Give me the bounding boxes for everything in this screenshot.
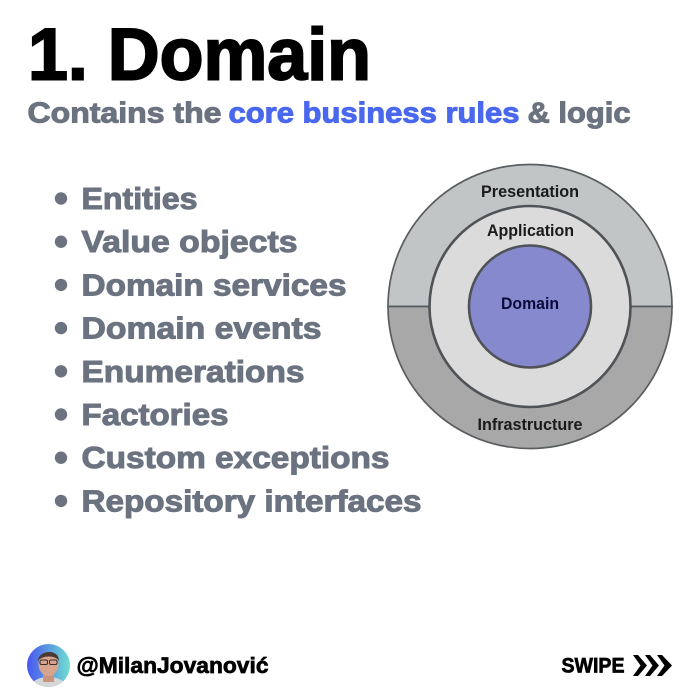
label: Infrastructure: Infrastructure xyxy=(478,415,582,434)
ring: infrastructure xyxy=(388,306,672,448)
item: Entities: Entities xyxy=(82,182,198,216)
core: domain xyxy=(469,246,591,368)
subtitle: Contains the xyxy=(28,98,222,130)
subtitle: core business rules xyxy=(228,98,520,130)
label: Presentation: Presentation xyxy=(481,182,579,201)
item: Domain services: Domain services xyxy=(82,268,346,302)
onion architecture diagram xyxy=(388,164,672,448)
subtitle xyxy=(28,98,630,130)
icon: swipe arrows xyxy=(633,655,672,676)
swipe label: SWIPE xyxy=(562,654,624,678)
author handle: @MilanJovanović xyxy=(76,653,268,678)
item: Factories: Factories xyxy=(82,398,228,432)
item: Custom exceptions: Custom exceptions xyxy=(82,441,390,475)
item: Enumerations: Enumerations xyxy=(82,355,304,389)
label: Application: Application xyxy=(487,221,574,240)
avatar xyxy=(27,644,70,687)
item: Value objects: Value objects xyxy=(82,225,298,259)
item: Domain events: Domain events xyxy=(82,312,322,346)
ring: application xyxy=(430,206,630,407)
bullet list xyxy=(55,182,422,518)
label: Domain: Domain xyxy=(501,294,559,313)
ring: presentation xyxy=(388,164,672,306)
item: Repository interfaces: Repository interfaces xyxy=(82,484,422,518)
subtitle: & logic xyxy=(528,98,630,130)
title: 1. Domain xyxy=(28,14,371,96)
